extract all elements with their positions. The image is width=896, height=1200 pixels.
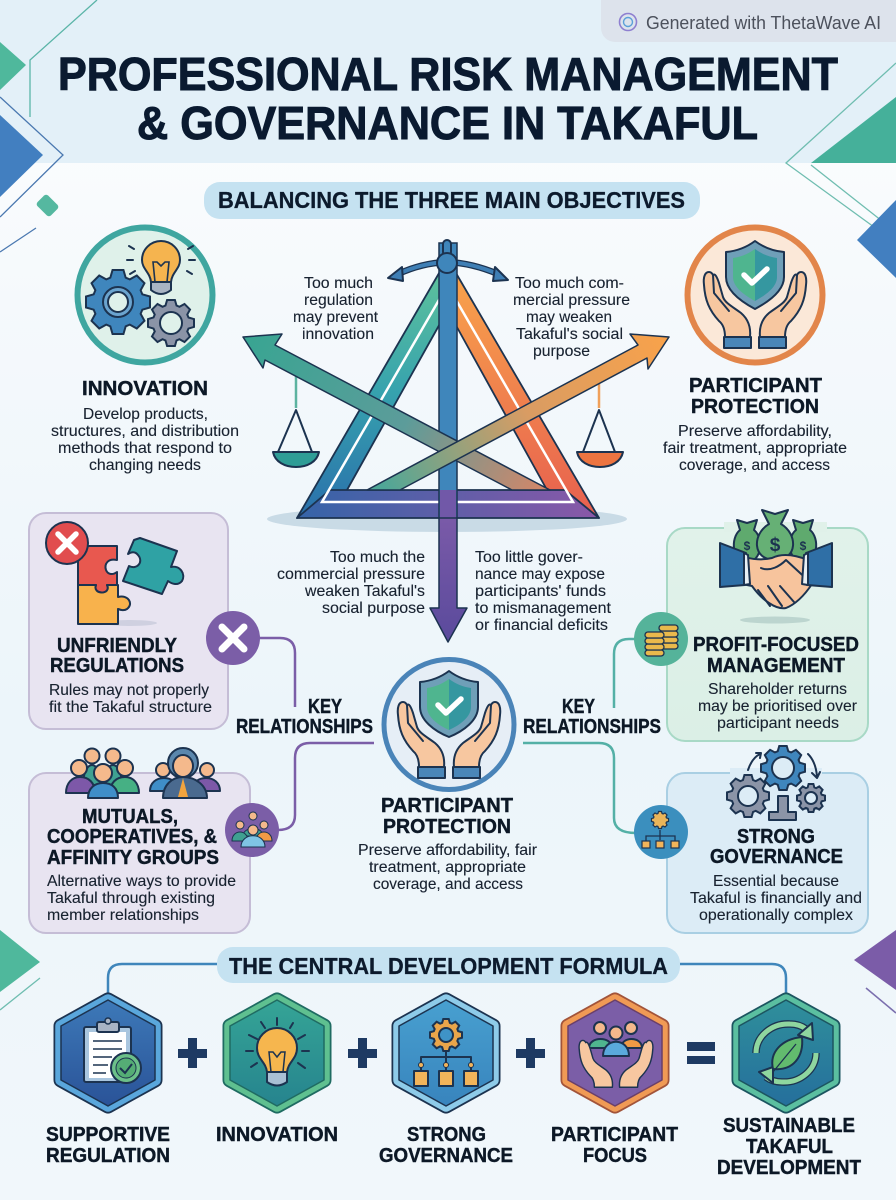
section heading: balancing objectives (204, 182, 700, 219)
description (47, 873, 236, 924)
icon: money bags and handshake: $ (800, 539, 807, 553)
icon: money bags and handshake: $ (744, 539, 751, 553)
title: PROFESSIONAL RISK MANAGEMENT (58, 48, 838, 100)
heading: MUTUALS, (82, 805, 178, 828)
left scale pan (273, 362, 319, 467)
icon: shield and hands (688, 228, 822, 362)
text: commercial pressure weakens purpose: social purpose (322, 600, 425, 617)
label: key relationships left: RELATIONSHIPS (236, 715, 373, 738)
label: SUPPORTIVE (46, 1123, 170, 1146)
label (46, 1123, 170, 1167)
connectors: left key relationships (258, 638, 374, 830)
text: too much commercial pressure: Too much com- (515, 275, 624, 292)
heading (693, 633, 859, 677)
heading: MANAGEMENT (707, 654, 845, 677)
panel: profit-focused management (667, 510, 868, 741)
description: Develop products, (83, 406, 208, 423)
description (663, 423, 847, 474)
connectors: right key relationships (523, 639, 640, 833)
watermark (601, 0, 896, 42)
text: commercial pressure weakens purpose (277, 549, 425, 617)
description: treatment, appropriate (369, 859, 526, 876)
pivot with curved arrows (388, 240, 508, 281)
text: too little governance: participants' funds (475, 583, 606, 600)
operator: plus (516, 1038, 545, 1068)
vertical mast (439, 243, 457, 518)
operator: plus (178, 1038, 207, 1068)
icon: shield and hands (384, 660, 514, 790)
heading: AFFINITY GROUPS (47, 846, 219, 869)
mast base overlap (440, 490, 456, 518)
formula step: participant focus (551, 1000, 678, 1167)
panel: central participant protection (358, 660, 537, 893)
description: may be prioritised over (698, 698, 857, 715)
heading (50, 634, 184, 677)
description (698, 681, 857, 732)
panel: participant protection objective (663, 228, 847, 474)
right scale pan (577, 384, 623, 467)
heading (381, 794, 513, 838)
description: structures, and distribution (51, 423, 239, 440)
text: too much regulation: innovation (302, 326, 374, 343)
text: too much regulation (293, 275, 379, 343)
formula step: strong governance (379, 1000, 513, 1167)
description: participant needs (717, 715, 839, 732)
description: Essential because (713, 873, 839, 890)
description: coverage, and access (373, 876, 523, 893)
text: too much commercial pressure (513, 275, 630, 360)
icon: member groups (66, 748, 220, 798)
label: TAKAFUL (746, 1135, 833, 1158)
node: members (225, 803, 279, 857)
text: too much regulation: may prevent (293, 309, 379, 326)
description: Takaful is financially and (690, 890, 862, 907)
text: too little governance: or financial deficits (475, 617, 608, 634)
ground shadow (267, 506, 627, 532)
description: fair treatment, appropriate (663, 440, 847, 457)
description: Shareholder returns (708, 681, 847, 698)
node: cross (206, 611, 260, 665)
label (551, 1123, 678, 1167)
label: key relationships right (523, 695, 661, 738)
text: too little governance (475, 549, 612, 634)
description: Preserve affordability, fair (358, 842, 537, 859)
description (358, 842, 537, 893)
panel: unfriendly regulations (29, 513, 228, 729)
section heading: balancing objectives: BALANCING THE THREE MAIN OBJECTIVES (218, 187, 685, 213)
label: key relationships right: KEY (562, 695, 595, 718)
heading (47, 805, 219, 869)
heading: REGULATIONS (50, 654, 184, 677)
text: too little governance: nance may expose (475, 566, 605, 583)
icon: money bags and handshake: $ (770, 535, 781, 556)
heading: PROTECTION (383, 815, 511, 838)
label: STRONG (407, 1123, 486, 1146)
heading (710, 825, 843, 868)
green arrow (243, 334, 550, 490)
text: too much commercial pressure: mercial pressure (513, 292, 630, 309)
icon: puzzle pieces with red cross (46, 522, 183, 626)
description: member relationships (47, 907, 199, 924)
triangle: right side (453, 268, 599, 518)
text: too much commercial pressure: purpose (533, 343, 590, 360)
panel: innovation objective (51, 228, 239, 474)
title (58, 48, 838, 149)
icon: leaf cycle hexagon (739, 1000, 833, 1106)
text: too little governance: to mismanagement (475, 600, 612, 617)
icon: people and hands hexagon (568, 1000, 662, 1106)
section heading: formula (217, 947, 680, 983)
label: key relationships left: KEY (308, 695, 342, 718)
icon: money bags and handshake (720, 510, 832, 624)
label: REGULATION (46, 1144, 170, 1167)
description: coverage, and access (679, 457, 830, 474)
description (49, 682, 212, 716)
heading: PROTECTION (691, 395, 819, 418)
description (51, 406, 239, 474)
top-left decoration (0, 0, 97, 252)
icon: clipboard hexagon (61, 1000, 155, 1106)
description: Alternative ways to provide (47, 873, 236, 890)
label: INNOVATION (216, 1123, 338, 1146)
label: key relationships right: RELATIONSHIPS (523, 715, 661, 738)
heading: STRONG (737, 825, 815, 848)
description: Rules may not properly (49, 682, 209, 699)
label: PARTICIPANT (551, 1123, 678, 1146)
text: too much commercial pressure: may weaken (526, 309, 612, 326)
heading: PARTICIPANT (689, 374, 822, 397)
triangle: left side (297, 268, 442, 518)
label: key relationships left (236, 695, 373, 738)
text: commercial pressure weakens purpose: Too much the (330, 549, 425, 566)
title: & GOVERNANCE IN TAKAFUL (137, 97, 758, 149)
label (379, 1123, 513, 1167)
formula step: innovation (216, 1000, 338, 1146)
operator: plus (348, 1038, 377, 1068)
panel: mutuals, cooperatives, affinity groups (29, 748, 250, 933)
label: DEVELOPMENT (717, 1156, 861, 1179)
description: Takaful through existing (47, 890, 215, 907)
triangle: inner highlight (322, 293, 573, 502)
heading: GOVERNANCE (710, 845, 843, 868)
icon: gears and light bulb (78, 228, 212, 362)
description: operationally complex (699, 907, 853, 924)
formula step: supportive regulation (46, 1000, 170, 1167)
heading: INNOVATION (82, 377, 208, 400)
formula result: sustainable takaful development (717, 1000, 861, 1179)
description: methods that respond to (58, 440, 232, 457)
label: SUSTAINABLE (723, 1114, 855, 1137)
heading: COOPERATIVES, & (47, 825, 217, 848)
heading (689, 374, 822, 418)
text: too much regulation: Too much (304, 275, 373, 292)
description: changing needs (89, 457, 201, 474)
connectors: formula (108, 964, 786, 993)
description: fit the Takaful structure (49, 699, 212, 716)
label: FOCUS (583, 1144, 647, 1167)
text: too little governance: Too little gover- (475, 549, 583, 566)
panel: strong governance (667, 746, 868, 933)
heading: PARTICIPANT (381, 794, 513, 817)
label: GOVERNANCE (379, 1144, 513, 1167)
down arrow (430, 518, 467, 642)
heading: PROFIT-FOCUSED (693, 633, 859, 656)
icon: hierarchy hexagon (399, 1000, 493, 1106)
triangle: base (297, 490, 599, 518)
text: too much regulation: regulation (304, 292, 373, 309)
operator: equals (687, 1042, 715, 1064)
node: governance hierarchy (634, 805, 688, 859)
description (690, 873, 862, 924)
heading: UNFRIENDLY (57, 634, 177, 657)
icon: light bulb hexagon (230, 1000, 324, 1106)
top-right decoration (786, 63, 896, 278)
chart: balance triangle with arrows (243, 240, 669, 642)
watermark: Generated with ThetaWave AI (646, 13, 881, 33)
node: coins (634, 612, 688, 666)
icon: gears (727, 746, 825, 820)
text: commercial pressure weakens purpose: commercial pressure (277, 566, 425, 583)
text: commercial pressure weakens purpose: weaken Takaful's (304, 583, 425, 600)
label (717, 1114, 861, 1179)
description: Preserve affordability, (678, 423, 832, 440)
bottom decorations (0, 930, 896, 1013)
orange arrow (367, 334, 669, 490)
text: too much commercial pressure: Takaful's social (516, 326, 623, 343)
section heading: formula: THE CENTRAL DEVELOPMENT FORMULA (229, 953, 668, 979)
